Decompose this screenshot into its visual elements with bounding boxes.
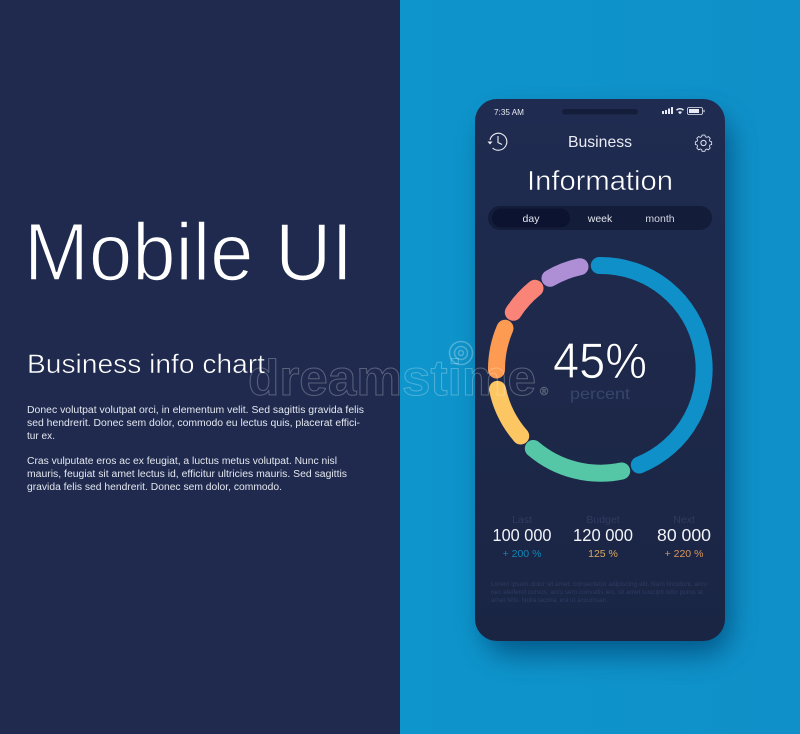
panel: phone mockup bbox=[475, 99, 725, 641]
stat: Next: + 220 % bbox=[665, 548, 703, 560]
phone shadow bbox=[484, 116, 730, 654]
stat: Last: Last bbox=[512, 514, 532, 526]
segment: coral bbox=[513, 288, 535, 312]
text block: lorem footer: amet felis. Nulla lacinia, est ut accumsan. bbox=[491, 597, 608, 604]
segment: green bbox=[533, 448, 622, 473]
text block: second paragraph: mauris, feugiat sit amet lectus id, efficitur ultricies mauris. Sed sagittis bbox=[27, 469, 347, 480]
text block: second paragraph: gravida felis sed hendrerit. Donec sem dolor, commodo. bbox=[27, 482, 282, 493]
text block: first paragraph: tur ex. bbox=[27, 431, 55, 442]
panel: left navy background bbox=[0, 0, 400, 734]
panel: right blue background bbox=[400, 0, 800, 734]
tab bar: day week month: month bbox=[645, 213, 675, 225]
text block: first paragraph: sed hendrerit. Donec sem dolor, commodo eu lectus quis, placerat effici- bbox=[27, 418, 360, 429]
segment: blue bbox=[599, 265, 704, 465]
text block: first paragraph bbox=[27, 405, 364, 442]
stat: Budget: 120 000 bbox=[573, 525, 633, 545]
heading: Mobile UI: Mobile UI bbox=[24, 207, 353, 298]
stat: Budget bbox=[573, 514, 633, 560]
segment: purple bbox=[550, 267, 580, 278]
stat: Last bbox=[492, 514, 552, 560]
stat: Last: + 200 % bbox=[503, 548, 541, 560]
value: 45%: 45% bbox=[553, 333, 647, 389]
stat: Next bbox=[657, 514, 711, 560]
tab bar: day week month: day bbox=[523, 213, 540, 225]
icon: settings gear bbox=[695, 135, 712, 151]
stat: Next: Next bbox=[673, 514, 695, 526]
tab bar: day week month bbox=[488, 206, 712, 230]
text block: lorem footer: Lorem ipsum dolor sit amet, consectetur adipiscing elit. Nam tincidunt, arcu bbox=[491, 581, 707, 588]
status bar time: 7:35 AM bbox=[494, 108, 524, 117]
phone body bbox=[475, 99, 725, 641]
icon: history clock bbox=[488, 133, 507, 150]
tab bar: day week month: week bbox=[587, 213, 613, 225]
watermark wordmark: dreamstime bbox=[248, 350, 536, 406]
icon: status indicators bbox=[662, 107, 704, 114]
text block: first paragraph: Donec volutpat volutpat orci, in elementum velit. Sed sagittis gravida felis bbox=[27, 405, 364, 416]
text block: lorem footer bbox=[491, 581, 707, 604]
chart: donut ring bbox=[496, 265, 704, 473]
text block: second paragraph: Cras vulputate eros ac ex feugiat, a luctus metus volutpat. Nunc nisl bbox=[27, 456, 337, 467]
watermark registered mark: ® bbox=[540, 386, 548, 398]
watermark spiral icon bbox=[450, 342, 472, 364]
label: percent: percent bbox=[570, 386, 631, 403]
segment: orange bbox=[496, 328, 505, 370]
segment: yellow bbox=[498, 389, 521, 436]
watermark: dreamstime bbox=[248, 342, 548, 406]
stat: Next: 80 000 bbox=[657, 525, 711, 545]
subheading: Business info chart: Business info chart bbox=[27, 349, 266, 379]
heading: Information: Information bbox=[527, 165, 673, 196]
stat: Budget: 125 % bbox=[588, 548, 618, 560]
stat: Budget: Budget bbox=[586, 514, 620, 526]
stat: Last: 100 000 bbox=[492, 525, 552, 545]
text block: lorem footer: nec eleifend cursus, arcu sem convallis leo, sit amet suscipit odio purus at bbox=[491, 589, 703, 596]
phone notch bbox=[562, 109, 638, 114]
text block: second paragraph bbox=[27, 456, 347, 493]
title: Business: Business bbox=[568, 134, 632, 151]
